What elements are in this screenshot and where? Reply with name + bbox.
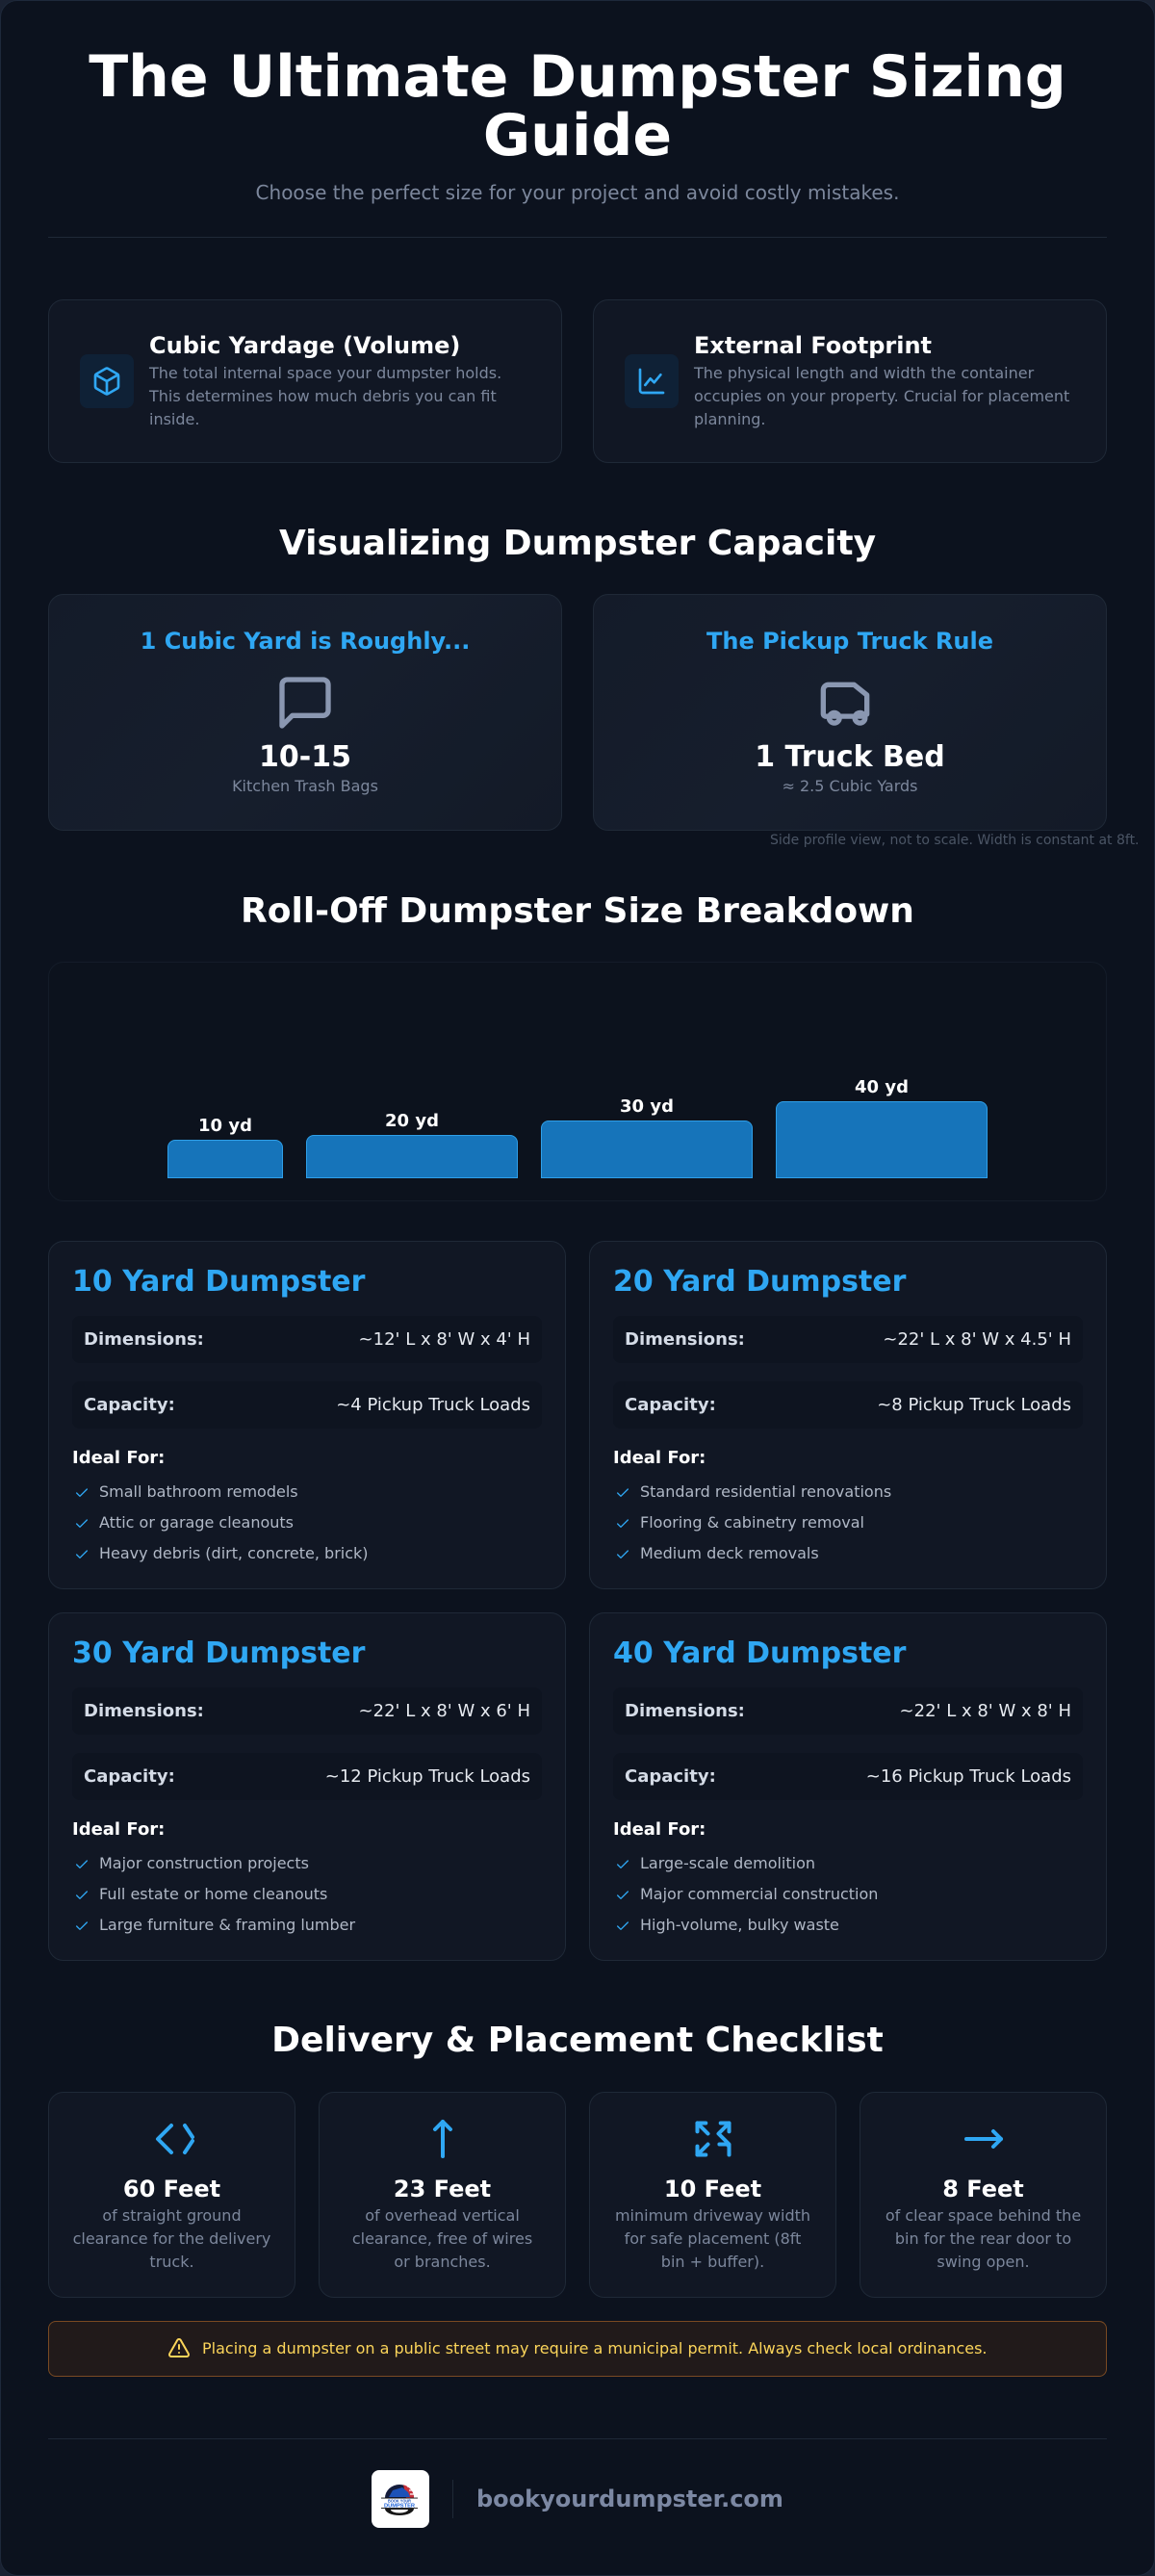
title: The Ultimate Dumpster Sizing [89, 43, 1066, 111]
description: truck. [149, 2253, 194, 2271]
spec: capacity: ~12 Pickup Truck Loads [325, 1766, 530, 1787]
icon: arrow right [964, 2129, 1003, 2149]
list item: Major construction projects [99, 1854, 309, 1872]
description: of straight ground [102, 2206, 242, 2225]
footer logo [372, 2470, 429, 2528]
bar: 10 yd [167, 1116, 283, 1178]
description: bin for the rear door to [895, 2229, 1071, 2248]
spec: dimensions [72, 1687, 542, 1735]
icon: code chevrons [156, 2124, 194, 2154]
panel: 20 yard [589, 1241, 1107, 1589]
label: 40 yd [855, 1077, 909, 1097]
panel: 10 feet [589, 2092, 836, 2298]
title [89, 43, 1066, 169]
description: of clear space behind the [886, 2206, 1081, 2225]
spec: capacity: Capacity: [625, 1395, 716, 1415]
ideal for heading: Ideal For: [72, 1819, 165, 1840]
value: 8 Feet [942, 2176, 1024, 2202]
icon: line chart [625, 354, 679, 408]
description [73, 2206, 270, 2271]
spec: dimensions: ~22' L x 8' W x 6' H [359, 1701, 530, 1721]
bar fill [306, 1135, 518, 1178]
label: 30 yd [620, 1096, 674, 1117]
spec: capacity: ~8 Pickup Truck Loads [877, 1395, 1071, 1415]
ideal for heading: Ideal For: [613, 1819, 706, 1840]
card title: 20 Yard Dumpster [613, 1265, 906, 1299]
ideal for heading: Ideal For: [613, 1448, 706, 1468]
spec: dimensions [72, 1316, 542, 1363]
panel: 30 yard [48, 1612, 566, 1961]
description: This determines how much debris you can fit [149, 387, 497, 405]
list item: Large furniture & framing lumber [99, 1916, 355, 1934]
list item: Flooring & cabinetry removal [640, 1513, 864, 1532]
heading: Cubic Yardage (Volume) [149, 332, 460, 359]
description: planning. [694, 410, 766, 428]
stat value: 10-15 [259, 740, 351, 774]
panel: pickup truck rule [593, 594, 1107, 831]
description [148, 364, 501, 428]
heading: size breakdown: Roll-Off Dumpster Size Breakdown [241, 891, 914, 931]
panel: 40 yard [589, 1612, 1107, 1961]
description: for safe placement (8ft [625, 2229, 801, 2248]
heading: checklist: Delivery & Placement Checklist [271, 2021, 884, 2060]
list item: Standard residential renovations [640, 1482, 891, 1501]
bar fill [167, 1140, 283, 1178]
spec: dimensions: ~22' L x 8' W x 4.5' H [883, 1329, 1071, 1350]
description: swing open. [937, 2253, 1030, 2271]
spec: capacity: Capacity: [625, 1766, 716, 1787]
value: 60 Feet [123, 2176, 220, 2202]
value: 10 Feet [664, 2176, 761, 2202]
label: 20 yd [385, 1111, 439, 1131]
card title: The Pickup Truck Rule [706, 628, 993, 655]
panel: 10 yard [48, 1241, 566, 1589]
description: clearance for the delivery [73, 2229, 270, 2248]
heading: External Footprint [694, 332, 932, 359]
ideal for heading: Ideal For: [72, 1448, 165, 1468]
footer logo: DUMPSTER [384, 2504, 415, 2510]
card title: 1 Cubic Yard is Roughly... [141, 628, 470, 655]
panel: external footprint [593, 299, 1107, 463]
card title: 30 Yard Dumpster [72, 1636, 365, 1670]
icon: truck [820, 682, 870, 726]
icon: warning triangle [168, 2338, 190, 2357]
spec: dimensions: ~12' L x 8' W x 4' H [359, 1329, 530, 1350]
spec: capacity [72, 1381, 542, 1429]
card title: 40 Yard Dumpster [613, 1636, 906, 1670]
warning text: Placing a dumpster on a public street may require a municipal permit. Always check local ordinances. [202, 2339, 988, 2357]
spec: capacity: Capacity: [84, 1766, 175, 1787]
spec: capacity [72, 1753, 542, 1800]
card title: 10 Yard Dumpster [72, 1265, 365, 1299]
list item: Full estate or home cleanouts [99, 1885, 327, 1903]
bar: 30 yd [541, 1096, 753, 1178]
panel: 60 feet [48, 2092, 295, 2298]
bar: 40 yd [776, 1077, 988, 1178]
description [352, 2206, 532, 2271]
description [615, 2206, 810, 2271]
description: minimum driveway width [615, 2206, 810, 2225]
heading: capacity: Visualizing Dumpster Capacity [279, 524, 876, 563]
icon: expand arrows [695, 2121, 732, 2157]
description: clearance, free of wires [352, 2229, 532, 2248]
description [886, 2206, 1081, 2271]
spec: dimensions: Dimensions: [84, 1701, 204, 1721]
spec: dimensions: Dimensions: [625, 1329, 745, 1350]
description: or branches. [394, 2253, 491, 2271]
list item: Heavy debris (dirt, concrete, brick) [99, 1544, 369, 1562]
value: 23 Feet [394, 2176, 491, 2202]
footer website: bookyourdumpster.com [476, 2486, 783, 2512]
list item: Attic or garage cleanouts [99, 1513, 294, 1532]
description: of overhead vertical [365, 2206, 520, 2225]
spec: dimensions: Dimensions: [625, 1701, 745, 1721]
stat caption: Kitchen Trash Bags [232, 777, 378, 795]
title: Guide [483, 102, 672, 169]
panel: 23 feet [319, 2092, 566, 2298]
description [693, 364, 1069, 428]
spec: capacity: ~4 Pickup Truck Loads [336, 1395, 530, 1415]
spec: dimensions: Dimensions: [84, 1329, 204, 1350]
description: The total internal space your dumpster holds. [149, 364, 501, 382]
stat value: 1 Truck Bed [755, 740, 945, 774]
subtitle: Choose the perfect size for your project and avoid costly mistakes. [256, 181, 899, 204]
bar: 20 yd [306, 1111, 518, 1178]
stat caption: ≈ 2.5 Cubic Yards [782, 777, 917, 795]
spec: capacity: ~16 Pickup Truck Loads [866, 1766, 1071, 1787]
list item: Major commercial construction [640, 1885, 878, 1903]
icon: arrow up [433, 2120, 452, 2158]
bar chart [48, 962, 1107, 1201]
bar fill [776, 1101, 988, 1178]
list item: Medium deck removals [640, 1544, 819, 1562]
list item: Large-scale demolition [640, 1854, 815, 1872]
description: inside. [149, 410, 199, 428]
description: bin + buffer). [661, 2253, 764, 2271]
spec: capacity: Capacity: [84, 1395, 175, 1415]
icon: cube [80, 354, 134, 408]
list item: High-volume, bulky waste [640, 1916, 839, 1934]
panel: 1 cubic yard [48, 594, 562, 831]
bar fill [541, 1121, 753, 1178]
spec: capacity [613, 1753, 1083, 1800]
list item: Small bathroom remodels [99, 1482, 298, 1501]
icon: message bubble [279, 677, 331, 729]
spec: dimensions: ~22' L x 8' W x 8' H [900, 1701, 1071, 1721]
spec: capacity [613, 1381, 1083, 1429]
spec: dimensions [613, 1316, 1083, 1363]
panel: cubic yardage [48, 299, 562, 463]
spec: dimensions [613, 1687, 1083, 1735]
label: 10 yd [198, 1116, 252, 1136]
panel: 8 feet [860, 2092, 1107, 2298]
description: The physical length and width the container [694, 364, 1034, 382]
callout: permit warning [48, 2321, 1107, 2377]
footer logo: BOOK YOUR [388, 2499, 412, 2504]
description: occupies on your property. Crucial for placement [694, 387, 1069, 405]
chart footnote: Side profile view, not to scale. Width is constant at 8ft. [770, 833, 1140, 848]
